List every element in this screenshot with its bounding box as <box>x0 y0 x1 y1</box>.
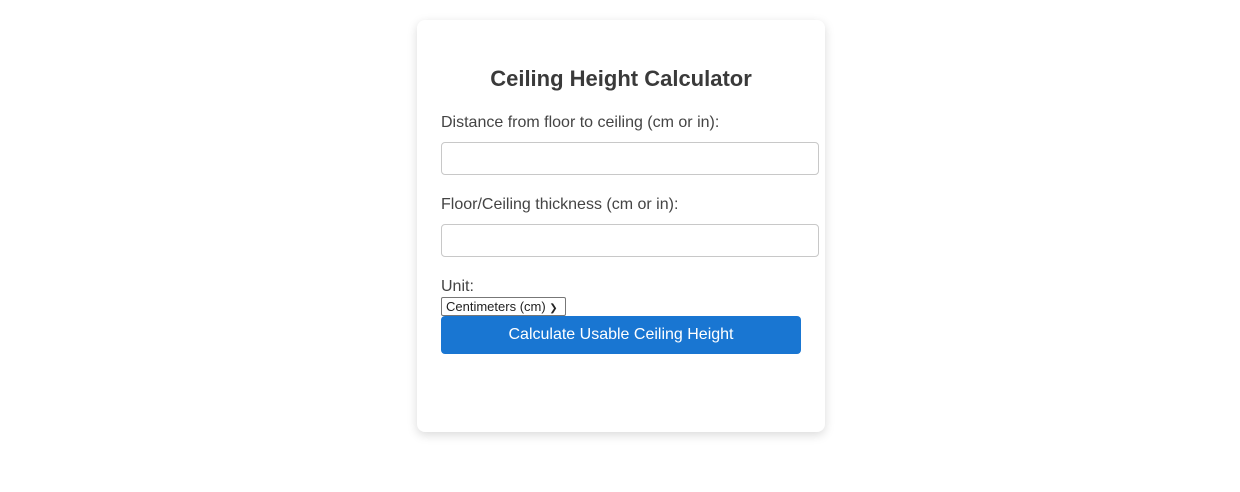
button: calculate: Calculate Usable Ceiling Height <box>508 326 734 343</box>
label: distance: Distance from floor to ceiling (cm or in): <box>441 114 719 131</box>
title: Ceiling Height Calculator <box>490 66 752 91</box>
label: unit: Unit: <box>441 278 474 295</box>
input: distance <box>441 142 819 175</box>
button: calculate <box>441 316 801 354</box>
panel: calculator card <box>417 20 825 432</box>
input: thickness <box>441 224 819 257</box>
label: thickness: Floor/Ceiling thickness (cm or in): <box>441 196 678 213</box>
select: unit: Centimeters (cm) ❯ <box>446 299 558 314</box>
